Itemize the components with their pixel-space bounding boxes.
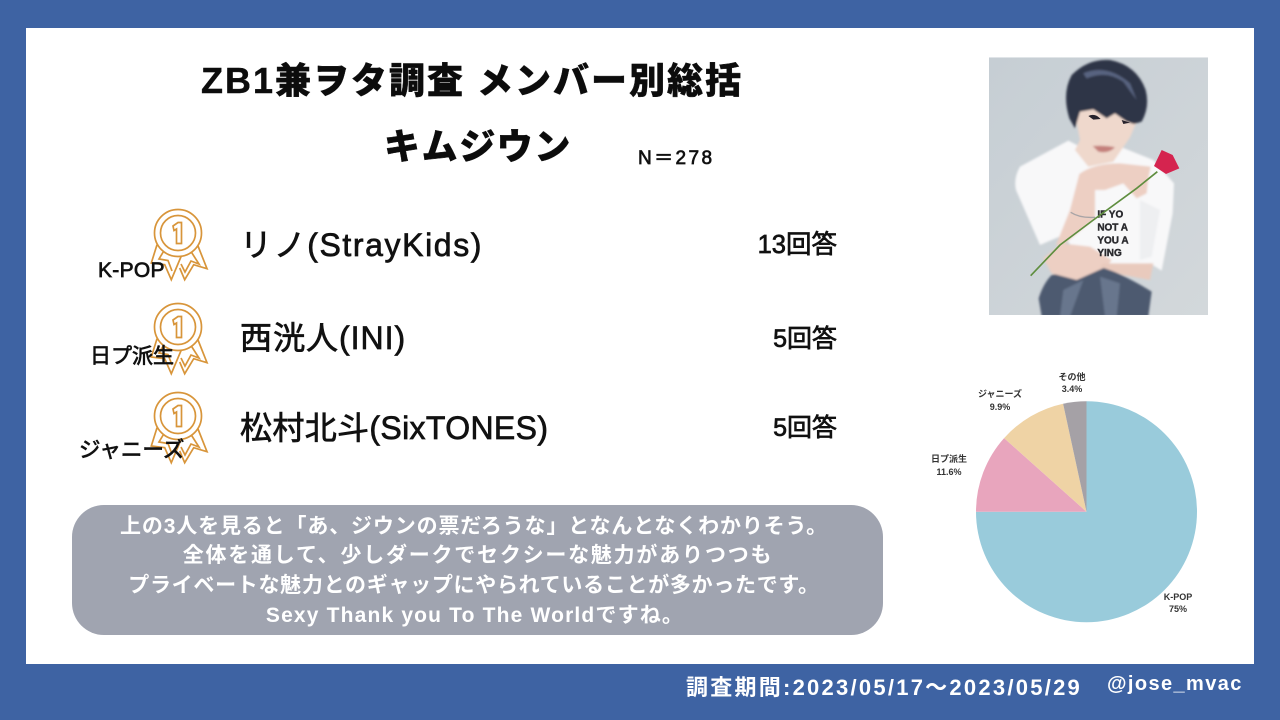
slice: ジャニーズ 9.9% xyxy=(1004,404,1086,512)
answer count: 日プ派生: 5回答 xyxy=(773,325,837,353)
summary line 3: プライベートな魅力とのギャップにやられていることが多かったです。 xyxy=(128,574,820,597)
sample size: N＝278 xyxy=(638,148,714,169)
subtitle: member name: キムジウン xyxy=(384,126,572,167)
shirt print: YING xyxy=(1097,248,1122,259)
category label: ジャニーズ: ジャニーズ xyxy=(79,438,184,462)
mouth xyxy=(1093,146,1115,152)
label: K-POP: K-POP xyxy=(1164,592,1192,602)
lower hand xyxy=(1043,243,1112,280)
label: 日プ派生: 日プ派生 xyxy=(931,453,967,464)
label: ジャニーズ: 9.9% xyxy=(990,402,1010,412)
callout: summary xyxy=(72,505,883,635)
rose stem xyxy=(1031,172,1157,276)
category label: K-POP: K-POP xyxy=(98,259,165,282)
shirt print: NOT A xyxy=(1097,222,1128,233)
rank name: 松村北斗: 松村北斗(SixTONES) xyxy=(240,410,548,446)
rank name: リノ: リノ(StrayKids) xyxy=(240,227,483,263)
summary line 1: 上の3人を見ると「あ、ジウンの票だろうな」となんとなくわかりそう。 xyxy=(120,515,828,538)
label: その他: その他 xyxy=(1058,371,1086,382)
label: 日プ派生 xyxy=(931,453,967,477)
arm xyxy=(1056,163,1151,245)
footer: account handle: @jose_mvac xyxy=(1107,673,1243,695)
slice: 日プ派生 11.6% xyxy=(976,438,1086,512)
bracelet xyxy=(1071,212,1095,217)
jeans xyxy=(1039,267,1152,317)
label: ジャニーズ xyxy=(978,388,1022,412)
shirt print: IF YO xyxy=(1097,209,1123,220)
title: ZB1兼ヲタ調査 メンバー別総括 xyxy=(201,60,743,101)
category label: 日プ派生: 日プ派生 xyxy=(90,345,174,368)
label: その他 xyxy=(1058,371,1086,394)
medal: 日プ派生 xyxy=(150,302,208,376)
rose bloom xyxy=(1154,150,1179,174)
summary line 2: 全体を通して、少しダークでセクシーな魅力がありつつも xyxy=(183,544,773,567)
neck and face xyxy=(1074,108,1138,167)
shirt print: YOU A xyxy=(1097,235,1129,246)
label: ジャニーズ: ジャニーズ xyxy=(978,388,1022,399)
slice: K-POP 75% xyxy=(976,401,1197,622)
shirt print xyxy=(1097,209,1129,259)
slice: その他 3.4% xyxy=(1063,401,1086,512)
eyes detail xyxy=(1088,115,1130,124)
rank name: 西洸人: 西洸人(INI) xyxy=(240,320,406,356)
photo: member holding a rose xyxy=(989,58,1208,315)
label: K-POP xyxy=(1164,592,1192,614)
label: K-POP: 75% xyxy=(1169,604,1187,614)
medal: K-POP xyxy=(150,208,208,282)
label: 日プ派生: 11.6% xyxy=(936,467,962,477)
answer count: ジャニーズ: 5回答 xyxy=(773,414,837,442)
medal: ジャニーズ xyxy=(150,392,208,465)
pie chart: genre share xyxy=(931,371,1197,622)
summary line 4: Sexy Thank you To The Worldですね。 xyxy=(266,604,684,627)
answer count: K-POP: 13回答 xyxy=(758,231,837,259)
footer: survey period: 調査期間:2023/05/17～2023/05/29 xyxy=(686,675,1082,700)
t-shirt xyxy=(1015,141,1174,271)
hair xyxy=(1066,60,1147,128)
label: その他: 3.4% xyxy=(1062,384,1082,394)
